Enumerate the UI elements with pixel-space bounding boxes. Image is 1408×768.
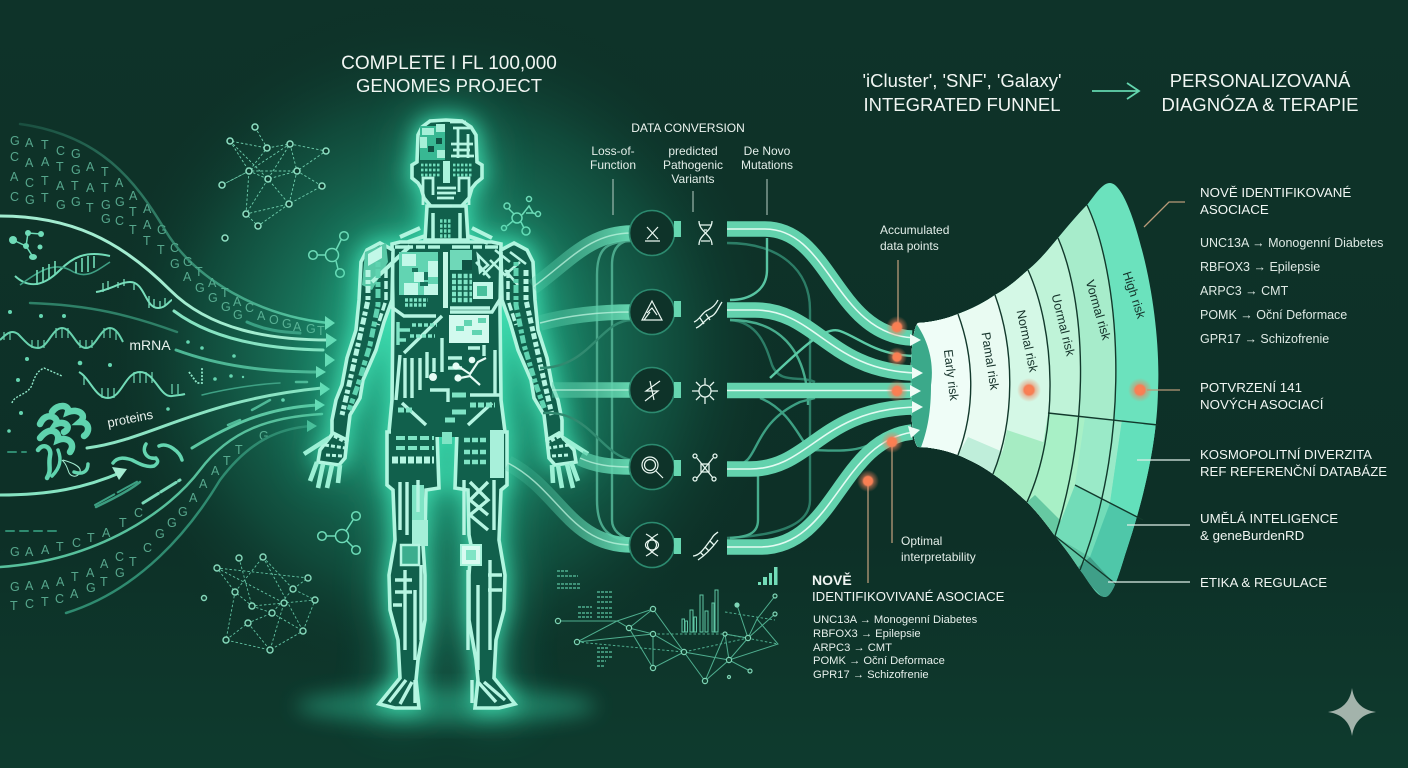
funnel: risk stages	[910, 183, 1158, 597]
label: loss of function: Function	[590, 158, 636, 172]
callout: newly identified associations right: POMK → Oční Deformace	[1200, 308, 1347, 322]
callout: newly identified associations lower: RBFOX3 → Epilepsie	[813, 628, 921, 640]
funnel bands	[910, 183, 1158, 597]
callout: newly identified associations right: RBFOX3 → Epilepsie	[1200, 260, 1320, 274]
molecule icon: right	[502, 196, 540, 235]
figure silhouette	[318, 120, 576, 708]
label: loss of function: Loss-of-	[591, 144, 635, 158]
callout: newly identified associations lower	[812, 571, 1005, 681]
funnel risk labels: Early risk	[941, 349, 961, 402]
tube stubs	[674, 221, 681, 554]
stream arrowheads	[112, 316, 337, 480]
right tube set	[727, 229, 923, 547]
left tube set	[508, 233, 632, 545]
callout: cosmopolitan diversity: KOSMOPOLITNÍ DIVERZITA	[1200, 447, 1372, 462]
stage circles	[630, 210, 674, 568]
right arm pixels	[508, 262, 569, 456]
callout: artificial intelligence: UMĚLÁ INTELIGENCE	[1200, 511, 1338, 526]
neck and shoulder detail	[395, 213, 498, 247]
network: lower left	[202, 554, 318, 653]
callout: newly identified associations right: ARPC3 → CMT	[1200, 284, 1289, 298]
heading: personalized diagnosis: PERSONALIZOVANÁ	[1170, 70, 1351, 91]
callout: newly identified associations lower: ARPC3 → CMT	[813, 642, 892, 654]
label: predicted pathogenic variants: Pathogenic	[663, 158, 723, 172]
network: upper left	[219, 124, 329, 241]
protein tail	[62, 460, 80, 476]
label: de novo mutations: Mutations	[741, 158, 793, 172]
label: predicted pathogenic variants	[663, 144, 723, 186]
figure glow	[318, 120, 576, 708]
torso circuit	[390, 296, 502, 425]
right leg detail	[461, 430, 505, 703]
network lines	[558, 596, 778, 681]
chest left mosaic	[399, 252, 438, 295]
left leg detail	[389, 438, 434, 704]
label: predicted pathogenic variants: Variants	[671, 172, 715, 186]
panel: data conversion pipelines	[508, 121, 915, 568]
callout: artificial intelligence	[1200, 511, 1338, 543]
callout: newly identified associations right	[1200, 185, 1383, 346]
funnel risk labels: High risk	[1120, 270, 1148, 321]
label: predicted pathogenic variants: predicted	[668, 144, 718, 158]
callout: newly identified associations right: NOVĚ IDENTIFIKOVANÉ	[1200, 185, 1351, 200]
shoulder patches	[362, 243, 526, 290]
callout: cosmopolitan diversity: REF REFERENČNÍ DATABÁZE	[1200, 464, 1387, 479]
label: de novo mutations	[741, 144, 793, 172]
callout: newly identified associations lower: GPR17 → Schizofrenie	[813, 669, 929, 681]
callout: confirmed associations: NOVÝCH ASOCIACÍ	[1200, 397, 1324, 412]
callout: newly identified associations lower: IDENTIFIKOVIVANÉ ASOCIACE	[812, 589, 1005, 604]
signal bars	[758, 567, 778, 585]
figure: digital human	[304, 120, 588, 708]
molecule icon: left lower	[318, 512, 360, 554]
chest centre	[443, 250, 493, 308]
heading: integrated funnel: 'iCluster', 'SNF', 'Galaxy'	[862, 70, 1062, 91]
heading: integrated funnel: INTEGRATED FUNNEL	[863, 94, 1061, 115]
callout: newly identified associations lower: POMK → Oční Deformace	[813, 655, 945, 667]
title: genomes project: GENOMES PROJECT	[356, 75, 542, 96]
callout: confirmed associations	[1200, 380, 1324, 412]
gene network in abdomen	[429, 357, 486, 385]
figure wide glow	[318, 120, 576, 708]
heading: personalized diagnosis	[1161, 70, 1359, 115]
fingers	[304, 438, 588, 488]
heading: data conversion: DATA CONVERSION	[631, 121, 745, 135]
heading: integrated funnel	[862, 70, 1062, 115]
label: loss of function	[590, 144, 636, 172]
DNA helix	[15, 254, 110, 285]
label leader lines	[613, 179, 767, 215]
label: optimal interpretability: interpretability	[901, 550, 976, 564]
label: de novo mutations: De Novo	[744, 144, 791, 158]
callout: newly identified associations right: GPR17 → Schizofrenie	[1200, 332, 1329, 346]
callout: artificial intelligence: & geneBurdenRD	[1200, 528, 1304, 543]
DNA icon column	[692, 221, 722, 560]
abdomen bright panel	[449, 315, 489, 343]
funnel risk labels: Uormal risk	[1049, 293, 1078, 358]
peptide chains	[74, 444, 182, 473]
funnel dividers	[958, 205, 1158, 585]
hip seam cover	[391, 429, 503, 437]
network nodes	[555, 594, 777, 684]
icon: sparkle watermark	[1328, 688, 1376, 736]
orange markers and leaders	[857, 202, 1190, 583]
label: accumulated data points: data points	[880, 239, 939, 253]
molecule cluster	[9, 230, 44, 260]
funnel risk labels: Vormal risk	[1083, 278, 1113, 342]
DNA letters lower: GAATCTATCCGGGAAATTGTCAATAAAGTCTCAGTG	[10, 429, 269, 613]
heading: personalized diagnosis: DIAGNÓZA & TERAPIE	[1161, 94, 1359, 115]
RNA wave 1	[96, 279, 172, 308]
label: optimal interpretability	[901, 534, 976, 564]
stream lines	[0, 124, 329, 613]
callout: confirmed associations: POTVRZENÍ 141	[1200, 380, 1302, 395]
DNA letters upper: GATCGCAATGATACTATATACGTGGTGGATAGCTAGTTCGGATGAGTGAGCAOGAGT	[10, 134, 325, 338]
label: optimal interpretability: Optimal	[901, 534, 942, 548]
arrow: funnel to diagnosis	[1092, 83, 1139, 99]
label: mRNA: mRNA	[129, 337, 171, 353]
label: accumulated data points	[880, 223, 949, 253]
funnel risk labels: Pamal risk	[979, 331, 1002, 392]
crotch block	[442, 432, 452, 444]
micro data blocks	[557, 571, 612, 666]
callout: newly identified associations right: ASOCIACE	[1200, 202, 1269, 217]
head detail	[420, 122, 474, 206]
label: proteins: proteins	[106, 407, 155, 430]
circle icons	[642, 227, 663, 556]
callout: newly identified associations lower: NOVĚ	[812, 571, 852, 588]
molecule icon: left upper	[309, 232, 348, 277]
funnel risk labels	[941, 270, 1148, 402]
chart: small network and bars	[555, 567, 778, 684]
RNA wave 2	[0, 328, 123, 348]
funnel risk labels: Normal risk	[1014, 309, 1041, 374]
thin connector lines	[540, 238, 915, 541]
callout: ethics and regulation: ETIKA & REGULACE	[1200, 575, 1327, 590]
bar chart	[682, 590, 718, 632]
scattered dots	[7, 310, 285, 433]
label: accumulated data points: Accumulated	[880, 223, 949, 237]
title: genomes project: COMPLETE I FL 100,000	[341, 53, 557, 74]
title: genomes project	[341, 53, 557, 96]
callout: newly identified associations right: UNC13A → Monogenní Diabetes	[1200, 236, 1383, 250]
RNA wave 3	[79, 372, 185, 398]
callout: newly identified associations lower: UNC13A → Monogenní Diabetes	[813, 614, 978, 626]
callout: cosmopolitan diversity	[1200, 447, 1387, 479]
protein fold	[38, 406, 88, 478]
panel: omics data streams	[0, 124, 337, 613]
left arm pixels	[325, 262, 386, 456]
